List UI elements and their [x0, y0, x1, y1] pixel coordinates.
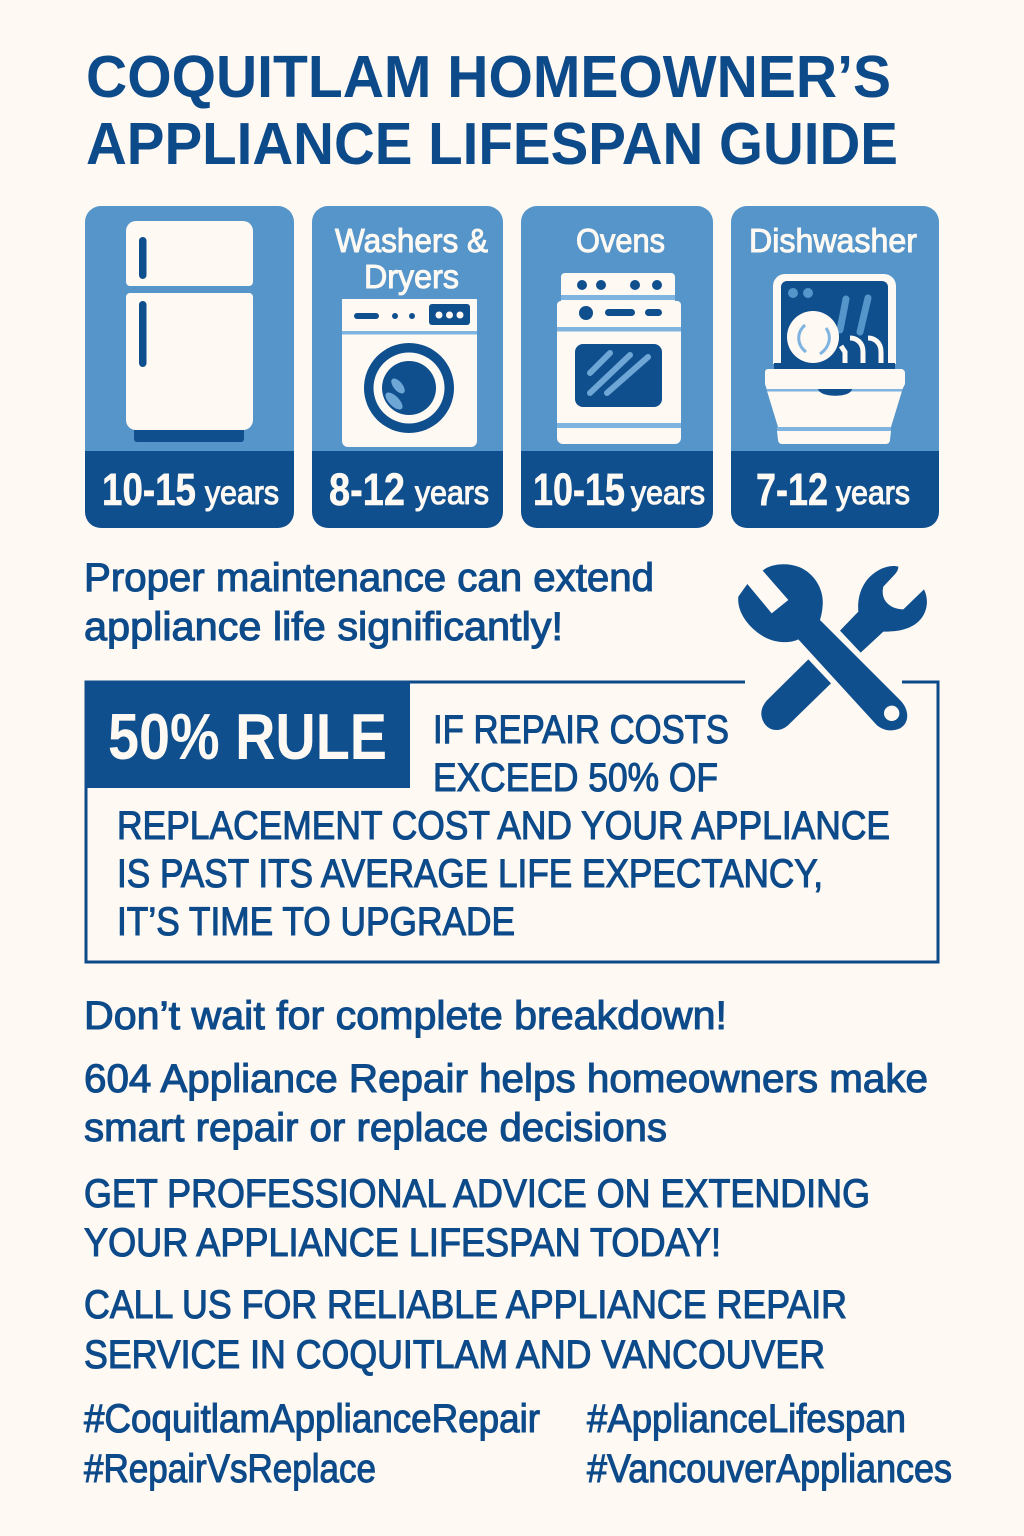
text: rule description: REPLACEMENT COST AND YOUR APPLIANCE: [117, 804, 890, 848]
label: washers and dryers: Dryers: [364, 259, 459, 296]
hashtags: [84, 1397, 952, 1491]
lifespan: dishwasher: [756, 464, 910, 515]
text: don't wait: Don’t wait for complete breakdown!: [84, 994, 727, 1038]
lifespan: dishwasher: 7-12: [756, 464, 828, 515]
lifespan: ovens: years: [631, 475, 705, 512]
lifespan: refrigerator: 10-15: [102, 464, 196, 515]
lifespan: refrigerator: [102, 464, 279, 515]
text: maintenance message: appliance life significantly!: [84, 605, 563, 649]
text: rule description: IS PAST ITS AVERAGE LIFE EXPECTANCY,: [117, 852, 823, 896]
title: [86, 44, 898, 177]
text: professional advice: YOUR APPLIANCE LIFESPAN TODAY!: [84, 1221, 721, 1265]
icon: oven: [557, 273, 681, 444]
text: professional advice: [84, 1172, 870, 1265]
label: dishwasher: Dishwasher: [749, 223, 917, 260]
lifespan: dishwasher: years: [836, 475, 910, 512]
label: washers and dryers: [335, 223, 488, 296]
lifespan: washers and dryers: years: [415, 475, 489, 512]
lifespan: refrigerator: years: [205, 475, 279, 512]
text: company message: smart repair or replace decisions: [84, 1106, 667, 1150]
title: APPLIANCE LIFESPAN GUIDE: [86, 111, 898, 177]
icon: refrigerator: [126, 221, 253, 442]
text: call to action: [84, 1283, 847, 1377]
icon: dishwasher: [765, 274, 905, 444]
hashtags: #ApplianceLifespan: [587, 1397, 906, 1441]
text: call to action: CALL US FOR RELIABLE APPLIANCE REPAIR: [84, 1283, 847, 1327]
title: COQUITLAM HOMEOWNER’S: [86, 44, 891, 110]
label: washers and dryers: Washers &: [335, 223, 488, 260]
text: maintenance message: Proper maintenance can extend: [84, 556, 654, 600]
lifespan: ovens: 10-15: [533, 464, 625, 515]
icon: crossed wrenches: [738, 564, 927, 730]
text: rule description: IT’S TIME TO UPGRADE: [117, 900, 515, 944]
text: rule description: EXCEED 50% OF: [433, 756, 718, 800]
text: company message: 604 Appliance Repair helps homeowners make: [84, 1057, 928, 1101]
panel: washers and dryers lifespan: [312, 206, 503, 528]
panel: refrigerator lifespan: [85, 206, 294, 528]
hashtags: #RepairVsReplace: [84, 1447, 376, 1491]
heading: 50% rule: 50% RULE: [108, 700, 387, 773]
text: rule description: [117, 708, 890, 944]
text: company message: [84, 1057, 928, 1150]
text: maintenance message: [84, 556, 654, 649]
text: professional advice: GET PROFESSIONAL ADVICE ON EXTENDING: [84, 1172, 870, 1216]
panel: dishwasher lifespan: [731, 206, 939, 528]
text: rule description: IF REPAIR COSTS: [433, 708, 729, 752]
heading: 50% rule: [85, 681, 410, 788]
text: call to action: SERVICE IN COQUITLAM AND VANCOUVER: [84, 1333, 825, 1377]
hashtags: #CoquitlamApplianceRepair: [84, 1397, 540, 1441]
lifespan: ovens: [533, 464, 705, 515]
panel: ovens lifespan: [521, 206, 713, 528]
lifespan: washers and dryers: [329, 464, 489, 515]
hashtags: #VancouverAppliances: [587, 1447, 952, 1491]
panel: 50% rule: [85, 681, 938, 962]
icon: washing machine: [342, 299, 477, 447]
label: ovens: Ovens: [576, 223, 665, 260]
lifespan: washers and dryers: 8-12: [329, 464, 405, 515]
